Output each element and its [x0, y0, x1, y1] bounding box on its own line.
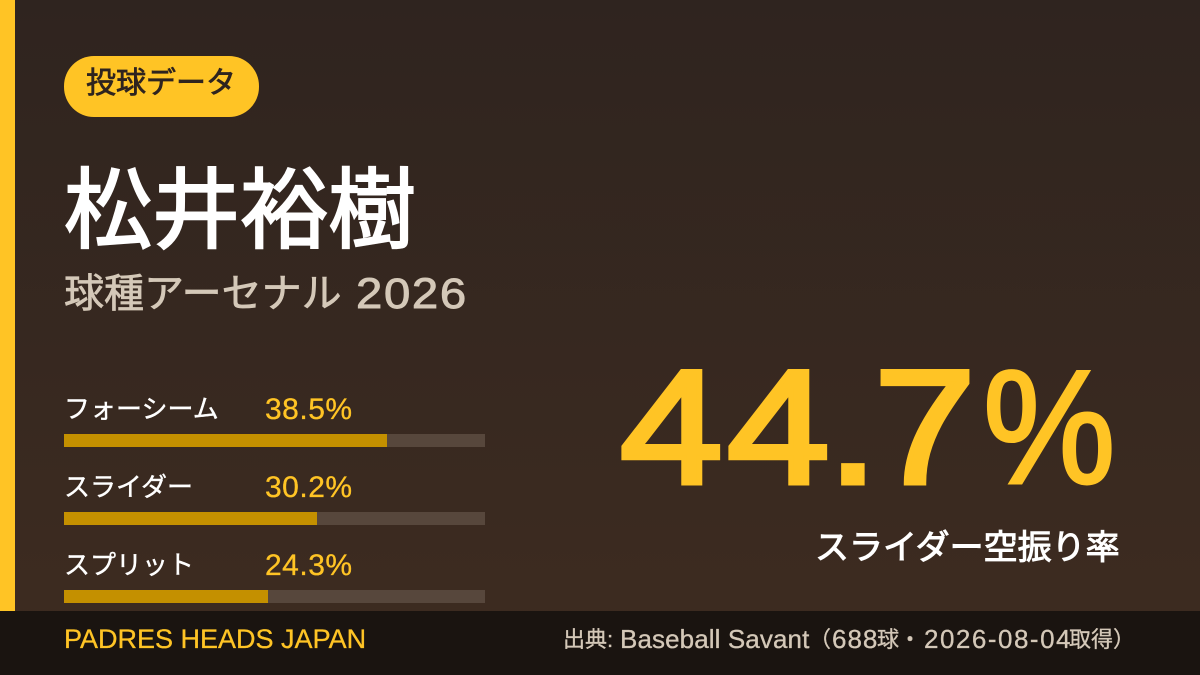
subtitle: 2026: [356, 270, 468, 318]
row: four-seam: 38.5%: [265, 393, 353, 426]
source note: 取得）: [1069, 627, 1135, 652]
subtitle: 球種アーセナル: [64, 272, 342, 316]
big stat: slider whiff rate: 4: [727, 337, 830, 518]
source note: ・: [899, 627, 921, 652]
big stat: slider whiff rate: .: [827, 337, 879, 518]
row: slider: スライダー: [64, 472, 193, 502]
row: splitter: 24.3%: [265, 549, 353, 582]
row: splitter: スプリット: [64, 550, 194, 580]
source note: （: [809, 627, 831, 652]
subtitle: [64, 270, 468, 318]
pitch usage bar chart: [64, 393, 485, 603]
source note: 球: [877, 627, 899, 652]
title: player name: 松井裕樹: [64, 161, 416, 260]
source note: Baseball Savant: [620, 624, 809, 654]
row: four-seam: [64, 393, 485, 447]
row: slider: [64, 471, 485, 525]
source note: 出典:: [563, 627, 613, 652]
big stat: slider whiff rate: 7: [874, 337, 976, 518]
footer bar: [0, 611, 1200, 675]
row: four-seam: フォーシーム: [64, 394, 219, 424]
big stat: slider whiff rate: 4: [620, 337, 723, 518]
category badge: 投球データ: [86, 67, 236, 100]
big stat: slider whiff rate: [620, 337, 1116, 518]
row: slider: 30.2%: [265, 471, 353, 504]
stat caption: スライダー空振り率: [815, 529, 1120, 567]
source note: 2026-08-04: [924, 624, 1072, 654]
source note: [563, 624, 1135, 654]
source note: 688: [832, 624, 878, 654]
row: splitter: [64, 549, 485, 603]
footer brand: PADRES HEADS JAPAN: [64, 624, 366, 654]
big stat: slider whiff rate: %: [983, 337, 1116, 518]
left accent bar: [0, 0, 15, 611]
category badge: [64, 56, 259, 117]
